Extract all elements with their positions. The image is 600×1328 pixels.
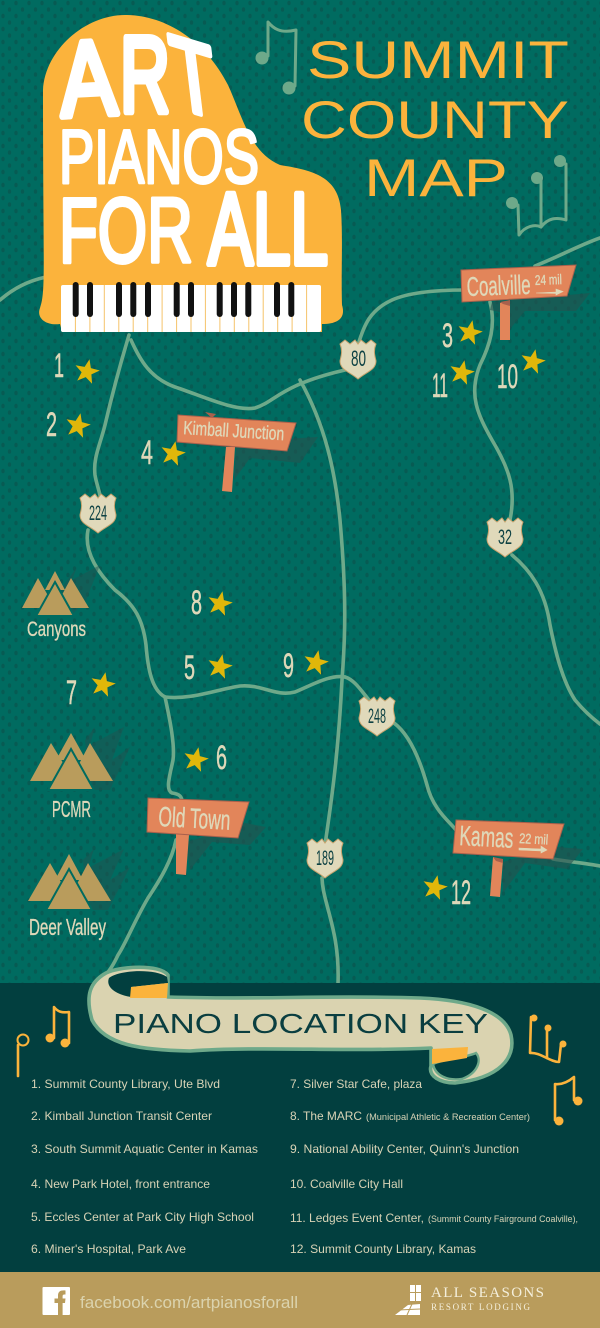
- location list: column two: 9. National Ability Center, Quinn's Junction: [290, 1142, 519, 1156]
- icon: facebook: [42, 1287, 70, 1315]
- location list: column two: [290, 1077, 578, 1256]
- banner title: PIANO LOCATION KEY: [113, 1008, 488, 1039]
- sign: Kimball Junction: Kimball Junction: [183, 418, 285, 445]
- location numbers: 10: [497, 358, 518, 396]
- logo: All Seasons Resort Lodging: ALL SEASONS: [431, 1285, 544, 1301]
- location list: column two: 12. Summit County Library, Kamas: [290, 1242, 476, 1256]
- shield: 248: [359, 697, 395, 736]
- location stars: [64, 318, 548, 901]
- sign: Kimball Junction: [177, 412, 318, 492]
- map title: SUMMIT: [307, 31, 569, 90]
- shield: 224: 224: [89, 502, 107, 525]
- piano keyboard: [61, 285, 321, 332]
- icon: music notes right: [506, 155, 566, 235]
- location numbers: 1: [54, 347, 64, 385]
- sign: Coalville: 24 mil: [535, 271, 562, 288]
- map background: [0, 0, 600, 984]
- location numbers: [46, 317, 518, 912]
- location list: column two: 10. Coalville City Hall: [290, 1177, 403, 1191]
- shield: 248: 248: [368, 705, 386, 728]
- location list: column one: 2. Kimball Junction Transit Center: [31, 1109, 212, 1123]
- icon: triple note right: [530, 1014, 566, 1062]
- icon: double note left: [46, 1007, 70, 1048]
- road network: [0, 238, 600, 984]
- heading: ART: T: [164, 12, 222, 142]
- heading: ART: [57, 12, 222, 142]
- heading: PIANOS: PIANOS: [59, 115, 259, 200]
- mountain: Canyons: Canyons: [27, 618, 86, 641]
- sign: Kamas: Kamas: [459, 820, 514, 854]
- mountain: PCMR: [30, 727, 130, 822]
- shield: 189: [307, 839, 343, 878]
- piano illustration: [39, 12, 343, 332]
- icon: double note lower right: [554, 1077, 582, 1126]
- icon: hollow note: [18, 1034, 28, 1076]
- location numbers: 7: [66, 674, 77, 712]
- location list: column two: 8. The MARC: [290, 1109, 362, 1123]
- location numbers: 3: [442, 317, 453, 355]
- map title: COUNTY: [301, 91, 569, 150]
- location numbers: 4: [141, 434, 153, 472]
- mountain: Deer Valley: Deer Valley: [29, 914, 106, 940]
- mountain: Deer Valley: [28, 849, 130, 940]
- logo: All Seasons Resort Lodging: RESORT LODGING: [431, 1302, 530, 1312]
- shield: 32: [487, 518, 523, 557]
- location numbers: 11: [432, 367, 448, 405]
- location list: column one: 4. New Park Hotel, front entrance: [31, 1177, 210, 1191]
- map title: [301, 31, 569, 208]
- location list: column two: 7. Silver Star Cafe, plaza: [290, 1077, 422, 1091]
- location numbers: 9: [283, 647, 294, 685]
- location numbers: 8: [191, 584, 202, 622]
- mountain: Canyons: [22, 565, 100, 641]
- location numbers: 12: [451, 874, 471, 912]
- location list: column one: 6. Miner's Hospital, Park Ave: [31, 1242, 186, 1256]
- map title: MAP: [364, 149, 508, 208]
- location list: column one: [31, 1077, 258, 1256]
- location list: column two: (Summit County Fairground Coalville),: [428, 1214, 578, 1225]
- piano body: [39, 15, 343, 332]
- mountain: PCMR: PCMR: [52, 796, 91, 822]
- shield: 189: 189: [316, 847, 334, 870]
- heading: ART: A: [57, 19, 119, 139]
- logo: All Seasons Resort Lodging: [395, 1285, 544, 1315]
- location list: column two: (Municipal Athletic & Recreation Center): [366, 1112, 530, 1123]
- location numbers: 2: [46, 406, 57, 444]
- shield: 80: 80: [351, 346, 366, 371]
- key panel background: [0, 983, 600, 1272]
- heading: ART: R: [120, 14, 170, 135]
- shield: 32: 32: [498, 526, 512, 549]
- shield: 224: [80, 494, 116, 533]
- location list: column one: 1. Summit County Library, Ute Blvd: [31, 1077, 220, 1091]
- heading: FOR ALL: ALL: [208, 172, 328, 286]
- location numbers: 6: [216, 739, 227, 777]
- banner: piano location key: [89, 967, 512, 1083]
- location list: column one: 5. Eccles Center at Park City High School: [31, 1210, 254, 1224]
- location list: column one: 3. South Summit Aquatic Center in Kamas: [31, 1142, 258, 1156]
- sign: Old Town: Old Town: [158, 801, 231, 836]
- location numbers: 5: [184, 649, 195, 687]
- sign: Old Town: [147, 798, 266, 875]
- location list: column two: 11. Ledges Event Center,: [290, 1211, 424, 1225]
- sign: Kamas: 22 mil: [519, 830, 549, 848]
- sign: Kamas: [453, 820, 583, 897]
- heading: FOR ALL: FOR: [59, 180, 193, 282]
- facebook url: facebook.com/artpianosforall: [80, 1293, 298, 1312]
- highway shields: [80, 340, 523, 878]
- footer bar: [0, 1272, 600, 1328]
- shield: 80: [340, 340, 376, 379]
- sign: Coalville: Coalville: [466, 270, 531, 302]
- sign: Coalville: [461, 265, 590, 340]
- heading: FOR ALL: [59, 172, 328, 286]
- icon: music notes top: [256, 22, 296, 94]
